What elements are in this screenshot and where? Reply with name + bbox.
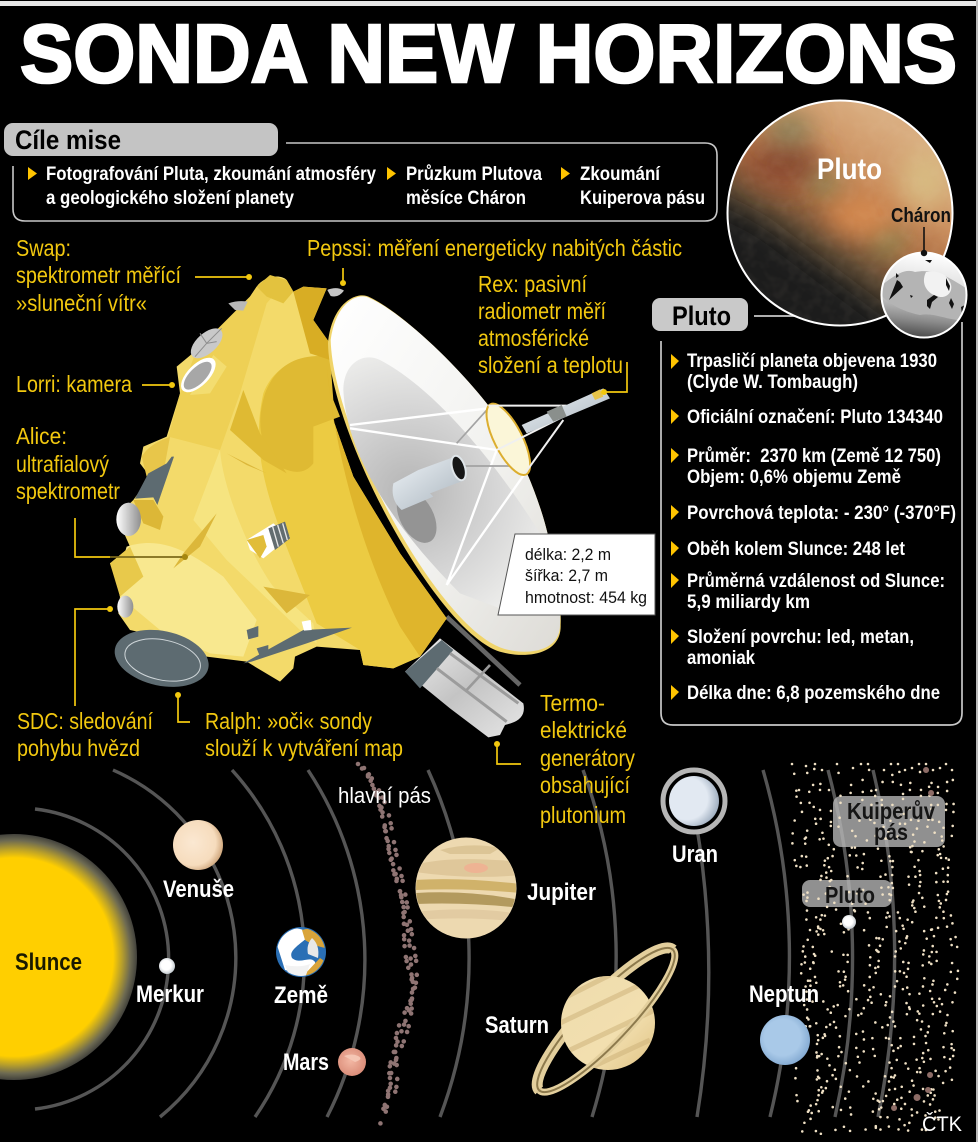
callout: generators: plutonium (540, 802, 626, 828)
list: Pluto facts: Průměrná vzdálenost od Slunce: (687, 571, 945, 592)
instrument: gray radiator panel (135, 457, 174, 505)
planet: Mercury: Merkur (136, 981, 204, 1008)
instrument: Ralph disc (109, 622, 214, 695)
list: Pluto facts: Oficiální označení: Pluto 134340 (687, 407, 943, 428)
list: Pluto facts: Délka dne: 6,8 pozemského dne (687, 683, 940, 704)
list: Pluto facts (671, 351, 956, 704)
goal 2: měsíce Cháron (406, 188, 526, 209)
instrument: Alice cylinder (116, 503, 141, 536)
callout: Swap: spektrometr měřící (16, 262, 182, 288)
callout: Lorri: Lorri: kamera (16, 371, 132, 397)
callout: Swap: Swap: (16, 235, 71, 261)
callout: SDC: SDC: sledování (17, 708, 154, 734)
planet: Neptune: Neptun (749, 981, 819, 1008)
label and dot: Pluto on orbit (825, 882, 875, 929)
callout: generators: elektrické (540, 717, 627, 743)
callout: Alice: ultrafialový (16, 451, 109, 477)
planet: Neptune (749, 981, 819, 1065)
callout: Rex: Rex: pasivní (478, 271, 588, 297)
list: Pluto facts: Průměr: 2370 km (Země 12 750) (687, 446, 941, 467)
list: Pluto facts: Složení povrchu: led, metan, (687, 627, 914, 648)
label: Kuiper belt: pás (874, 819, 908, 845)
label: Pluto: Pluto (817, 153, 882, 186)
feed horn (393, 454, 469, 510)
goal 2 (387, 164, 542, 209)
asteroid main belt (358, 764, 417, 1128)
panel: Pluto facts frame lines (661, 316, 962, 725)
instrument: SDC (117, 596, 133, 618)
planet: Saturn (486, 942, 678, 1096)
instrument: Lorri camera (175, 352, 227, 398)
goal 3: Zkoumání (580, 164, 661, 185)
planet: Earth (274, 927, 328, 1009)
list: Pluto facts: 5,9 miliardy km (687, 592, 810, 613)
callout: Swap: »sluneční vítr« (16, 290, 147, 316)
callout: Rex: složení a teplotu (478, 352, 623, 378)
goal 2: Průzkum Plutova (406, 164, 542, 185)
heading: Pluto facts: Pluto (672, 301, 731, 331)
planet: Saturn: Saturn (485, 1012, 549, 1039)
lower plate (243, 620, 352, 663)
callout: Alice: spektrometr (16, 478, 120, 504)
goal 3: Kuiperova pásu (580, 188, 705, 209)
illustration: Sun (0, 834, 137, 1080)
list: Pluto facts: (Clyde W. Tombaugh) (687, 372, 858, 393)
callout: SDC (17, 606, 154, 761)
planet: Mercury (136, 958, 204, 1008)
list: Pluto facts: amoniak (687, 648, 755, 669)
dimensions box: hmotnost: 454 kg (525, 589, 647, 607)
callout: Ralph: Ralph: »oči« sondy (205, 708, 372, 734)
bus body (110, 275, 447, 682)
callout: Rex: radiometr měří (478, 298, 607, 324)
planet: Venus: Venuše (163, 876, 234, 903)
RTG generators (405, 617, 524, 737)
instrument: Rex antenna (488, 388, 610, 473)
goal 1: a geologického složení planety (46, 188, 294, 209)
planet: Uranus (663, 770, 725, 868)
callout: Pepssi: Pepssi: měření energeticky nabitých částic (307, 235, 682, 261)
label: Charon with pointer (891, 205, 951, 256)
illustration: New Horizons spacecraft (109, 275, 610, 737)
planet: Uranus: Uran (672, 841, 718, 868)
callout background: Kuiper belt (833, 796, 945, 847)
goal 1 (28, 164, 376, 209)
title: SONDA NEW HORIZONS (20, 7, 957, 100)
credit: ČTK (922, 1113, 962, 1136)
callout: Alice: Alice: (16, 423, 67, 449)
callout: generators: Termo- (540, 690, 605, 716)
high-gain dish (328, 295, 561, 655)
callout: Rex: atmosférické (478, 325, 589, 351)
label: Kuiper belt (847, 798, 935, 845)
planet: Jupiter (415, 838, 596, 938)
instrument: Swap (186, 323, 228, 364)
callout: Alice (16, 423, 188, 560)
instrument: Pepssi (327, 288, 344, 297)
subreflector (478, 398, 539, 481)
solar system orbits (35, 770, 895, 1117)
list: Pluto facts: Trpasličí planeta objevena 1930 (687, 351, 937, 372)
heading: Pluto facts (652, 298, 748, 331)
callout: generators: generátory (540, 745, 635, 771)
dimensions box: šířka: 2,7 m (525, 567, 608, 585)
planet: Mars: Mars (283, 1049, 329, 1076)
heading: mission goals (4, 123, 278, 156)
planet: Venus (163, 820, 234, 903)
planet: Earth: Země (274, 982, 328, 1009)
planet: Mars (283, 1048, 366, 1076)
planet: Jupiter: Jupiter (527, 879, 596, 906)
callout: generators: obsahující (540, 772, 631, 798)
label and dot: Pluto on orbit: Pluto (825, 882, 875, 908)
callout: Ralph: slouží k vytváření map (205, 735, 403, 761)
goal 3 (561, 164, 705, 209)
callout: Ralph (175, 692, 403, 761)
label: Kuiper belt: Kuiperův (847, 798, 935, 824)
callout: Swap (16, 235, 252, 316)
heading: mission goals: Cíle mise (15, 125, 121, 155)
callout background: Pluto on orbit (802, 880, 892, 907)
callout: SDC: pohybu hvězd (17, 735, 140, 761)
callout: Pepssi (307, 235, 682, 286)
Kuiper belt dots (792, 764, 958, 1142)
callout: Rex (478, 271, 627, 395)
dimensions box: délka: 2,2 m (525, 546, 611, 564)
callout: generators (494, 690, 635, 828)
goal 1: Fotografování Pluta, zkoumání atmosféry (46, 164, 376, 185)
label: Charon with pointer: Cháron (891, 205, 951, 227)
panel: mission goals (4, 123, 717, 221)
dimensions box (498, 534, 655, 615)
instrument: striped box (247, 522, 290, 558)
illustration: Charon moon (882, 252, 966, 338)
list: Pluto facts: Objem: 0,6% objemu Země (687, 467, 901, 488)
label: main belt: hlavní pás (338, 783, 431, 808)
illustration: Pluto planet (726, 100, 954, 326)
label: Sun: Slunce (15, 949, 82, 976)
list: Pluto facts: Oběh kolem Slunce: 248 let (687, 539, 906, 560)
small dome (228, 301, 248, 311)
